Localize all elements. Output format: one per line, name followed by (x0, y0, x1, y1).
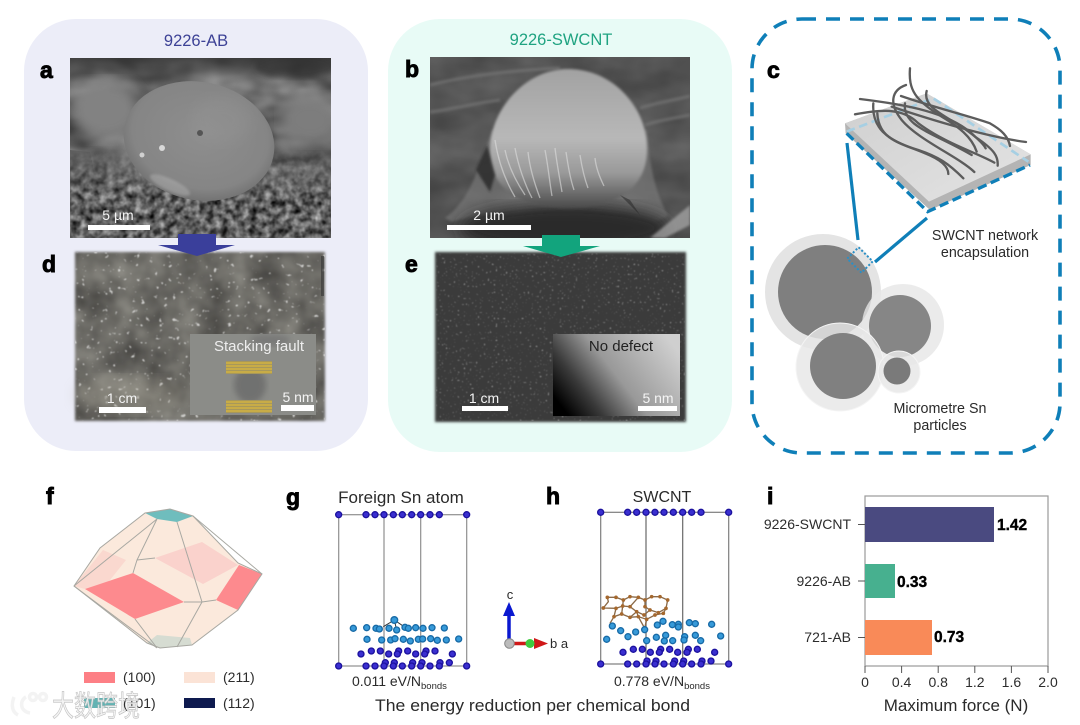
x axis: 0.8 (928, 674, 948, 690)
legend item (100): (100) (123, 669, 156, 685)
x axis: 2.0 (1038, 674, 1058, 690)
bar 9226-SWCNT: 1.42 (997, 517, 1027, 534)
x axis: 0 (861, 674, 869, 690)
panel: 9226-SWCNT (388, 19, 732, 452)
label b: b (405, 56, 419, 82)
inset: no defect (553, 334, 680, 416)
zoom lines (847, 143, 927, 262)
illustration: SWCNT film (845, 68, 1031, 212)
bar 9226-SWCNT: 9226-SWCNT (764, 516, 851, 532)
legend item (101): (101) (123, 695, 156, 711)
legend item (112) (184, 695, 255, 711)
watermark logo (12, 694, 47, 715)
caption g and h: The energy reduction per chemical bond (375, 696, 690, 715)
photograph d: rough surface (75, 252, 325, 421)
bar 9226-AB: 0.33 (897, 574, 928, 591)
scale bar b (447, 207, 531, 230)
bar 721-AB (804, 620, 965, 655)
x axis: Maximum force (N) (884, 696, 1028, 715)
label g: g (286, 484, 300, 510)
legend item (112): (112) (223, 695, 255, 711)
arrow a to d (158, 234, 235, 256)
label a: a (40, 57, 53, 83)
scale bar inset d: 5 nm (282, 389, 314, 405)
scale bar e: 1 cm (469, 390, 499, 406)
x axis: 1.6 (1002, 674, 1021, 690)
label e: e (405, 251, 418, 277)
label f: f (46, 483, 54, 509)
legend f (84, 669, 255, 711)
x axis: 0.4 (892, 674, 912, 690)
scale bar b: 2 µm (473, 207, 505, 223)
label i: i (767, 483, 773, 509)
caption: SWCNT network encapsulation: SWCNT network (932, 228, 1039, 244)
scale bar d: 1 cm (107, 390, 137, 406)
inset: stacking fault (190, 334, 316, 415)
scale bar a: 5 µm (102, 207, 134, 223)
label d: d (42, 251, 56, 277)
scale bar inset e: 5 nm (642, 390, 674, 406)
x axis: 1.2 (965, 674, 985, 690)
crystal model h (598, 509, 732, 667)
legend item (211): (211) (223, 669, 255, 685)
panel: 9226-AB (24, 19, 368, 451)
caption: Micrometre Sn particles (894, 401, 987, 434)
legend item (211) (184, 669, 255, 685)
crystal model g (336, 512, 470, 669)
yellow fault bands (226, 361, 272, 413)
x axis (861, 666, 1058, 715)
watermark: 大数跨境 (52, 690, 140, 723)
scale bar a (88, 207, 150, 230)
caption: Micrometre Sn particles: particles (913, 418, 967, 434)
caption: SWCNT network encapsulation (932, 228, 1039, 261)
axis triad (503, 587, 569, 651)
SWCNT fragment (601, 595, 669, 628)
arrow b to e (523, 235, 600, 257)
scale bar e (462, 390, 508, 411)
watermark (12, 690, 140, 723)
value h: bonds (684, 681, 710, 692)
caption: SWCNT network encapsulation: encapsulation (941, 245, 1029, 261)
heading: 9226-AB: 9226-AB (164, 32, 228, 50)
micrograph a: particle on foam (69, 54, 340, 238)
bar 721-AB: 721-AB (804, 629, 851, 645)
axis triad: b a (550, 636, 569, 651)
label c: c (767, 57, 780, 83)
inset: stacking fault: Stacking fault (214, 338, 305, 355)
zoom window on particle (847, 247, 873, 273)
value g: bonds (421, 681, 447, 692)
bar 721-AB: 0.73 (934, 629, 965, 646)
panel: schematic c (752, 19, 1060, 453)
heading g: Foreign Sn atom (338, 488, 464, 507)
micrograph b: encapsulated particle (430, 57, 690, 252)
value g: 0.011 eV/N (352, 673, 421, 689)
heading h: SWCNT (633, 489, 692, 506)
value h: 0.778 eV/N (614, 673, 684, 689)
inset: no defect: No defect (589, 338, 654, 355)
bar 9226-AB (797, 564, 928, 598)
label h: h (546, 483, 560, 509)
polyhedron f (74, 509, 262, 648)
photograph e: smooth surface (435, 252, 686, 422)
scale bar d (99, 390, 146, 413)
caption: Micrometre Sn particles: Micrometre Sn (894, 401, 987, 417)
nanotube strands (855, 68, 1026, 178)
bar 9226-SWCNT (764, 507, 1027, 542)
legend item (100) (84, 669, 156, 685)
bar chart i (764, 496, 1058, 715)
legend item (101) (84, 695, 156, 711)
heading: 9226-SWCNT: 9226-SWCNT (510, 31, 612, 49)
bar 9226-AB: 9226-AB (797, 573, 851, 589)
illustration: Sn particles (765, 234, 944, 411)
axis triad: c (507, 587, 514, 602)
